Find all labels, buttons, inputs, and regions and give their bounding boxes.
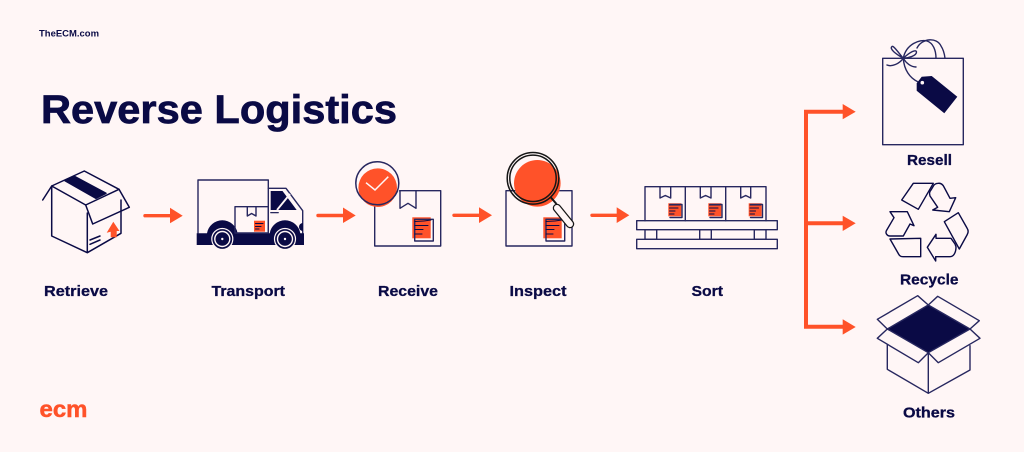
icon: box with check badge (receive) (354, 160, 441, 246)
icon: delivery truck (transport) (197, 180, 304, 250)
arrow: retrieve to transport (145, 208, 183, 223)
icon: shopping bag with tag (resell) (883, 40, 963, 145)
label: Others: Others (903, 405, 955, 422)
label: Resell: Resell (907, 152, 952, 169)
label: Retrieve: Retrieve (44, 283, 108, 300)
arrow: inspect to sort (592, 207, 629, 223)
label: Inspect: Inspect (510, 283, 567, 300)
icon: box with magnifier (inspect) (506, 152, 572, 246)
arrow: receive to inspect (454, 207, 492, 223)
branching arrows to outcomes (806, 104, 856, 335)
icon: open box (retrieve) (43, 171, 129, 253)
logo: ecm: ecm (40, 396, 88, 422)
icon: open empty box (others) (877, 296, 980, 393)
label: Recycle: Recycle (900, 271, 958, 288)
title: Reverse Logistics (41, 88, 397, 132)
label: Transport: Transport (212, 283, 285, 300)
arrow: transport to receive (318, 208, 356, 223)
icon: recycle symbol (886, 183, 968, 261)
label: Sort: Sort (692, 283, 723, 300)
icon: boxes on pallet (sort) (637, 187, 777, 249)
label: Receive: Receive (378, 283, 438, 300)
site name: TheECM.com (39, 28, 99, 40)
